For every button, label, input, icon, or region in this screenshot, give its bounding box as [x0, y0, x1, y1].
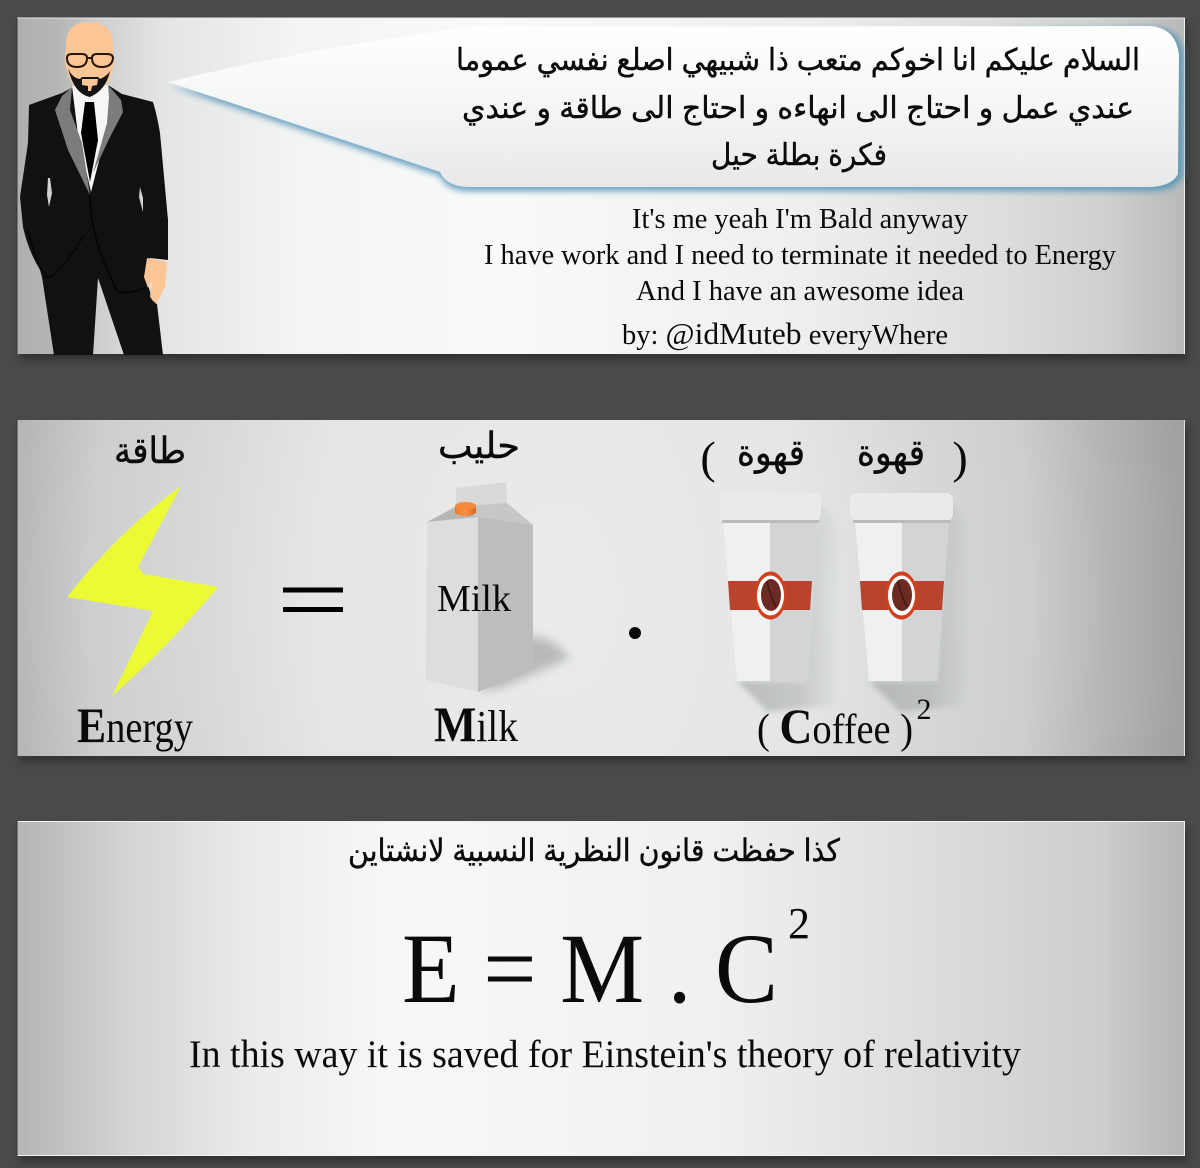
label: milk arabic: حليب	[438, 425, 520, 466]
equals sign	[283, 588, 343, 612]
label: coffee arabic	[700, 432, 968, 483]
english caption: In this way it is saved for Einstein's theory of relativity	[189, 1033, 1021, 1076]
speech bubble	[168, 26, 1183, 191]
panel: analogy equation	[17, 420, 1188, 762]
label: coffee arabic: )	[952, 432, 968, 483]
arabic speech text: فكرة بطلة حيل	[711, 139, 887, 172]
formula: E = M . C squared: 2	[788, 899, 810, 948]
english translation text	[484, 204, 1116, 307]
arabic speech text: السلام عليكم انا اخوكم متعب ذا شبيهي اصلع نفسي عموما	[456, 44, 1140, 78]
english translation text: I have work and I need to terminate it needed to Energy	[484, 240, 1116, 271]
label: coffee arabic: قهوة	[857, 432, 925, 474]
english translation text: And I have an awesome idea	[636, 276, 965, 307]
arabic speech text: عندي عمل و احتاج الى انهاءه و احتاج الى طاقة و عندي	[462, 92, 1134, 126]
panel: einstein formula	[17, 821, 1188, 1162]
arabic caption: كذا حفظت قانون النظرية النسبية لانشتاين	[348, 833, 840, 869]
label: coffee squared: ( Coffee )	[757, 698, 913, 754]
icon: lightning bolt	[67, 486, 218, 696]
label: milk: Milk	[434, 696, 518, 752]
arabic speech text	[456, 44, 1140, 172]
label: energy arabic: طاقة	[114, 430, 186, 471]
carton label: Milk	[437, 578, 511, 620]
formula: E = M . C squared: E = M . C	[402, 913, 778, 1024]
icon: milk carton	[426, 482, 570, 692]
dot operator	[629, 627, 641, 639]
label: coffee arabic: قهوة	[737, 432, 805, 474]
label: coffee arabic: (	[700, 432, 716, 483]
label: coffee squared: 2	[916, 693, 932, 726]
icon: coffee cup right	[850, 493, 974, 712]
english translation text: It's me yeah I'm Bald anyway	[632, 204, 968, 235]
panel: speech introduction	[17, 18, 1188, 360]
illustration: bald man in black suit	[20, 22, 168, 355]
author credit: by: @idMuteb everyWhere	[622, 316, 948, 351]
icon: coffee cup left	[720, 493, 842, 712]
label: energy: Energy	[77, 697, 193, 753]
